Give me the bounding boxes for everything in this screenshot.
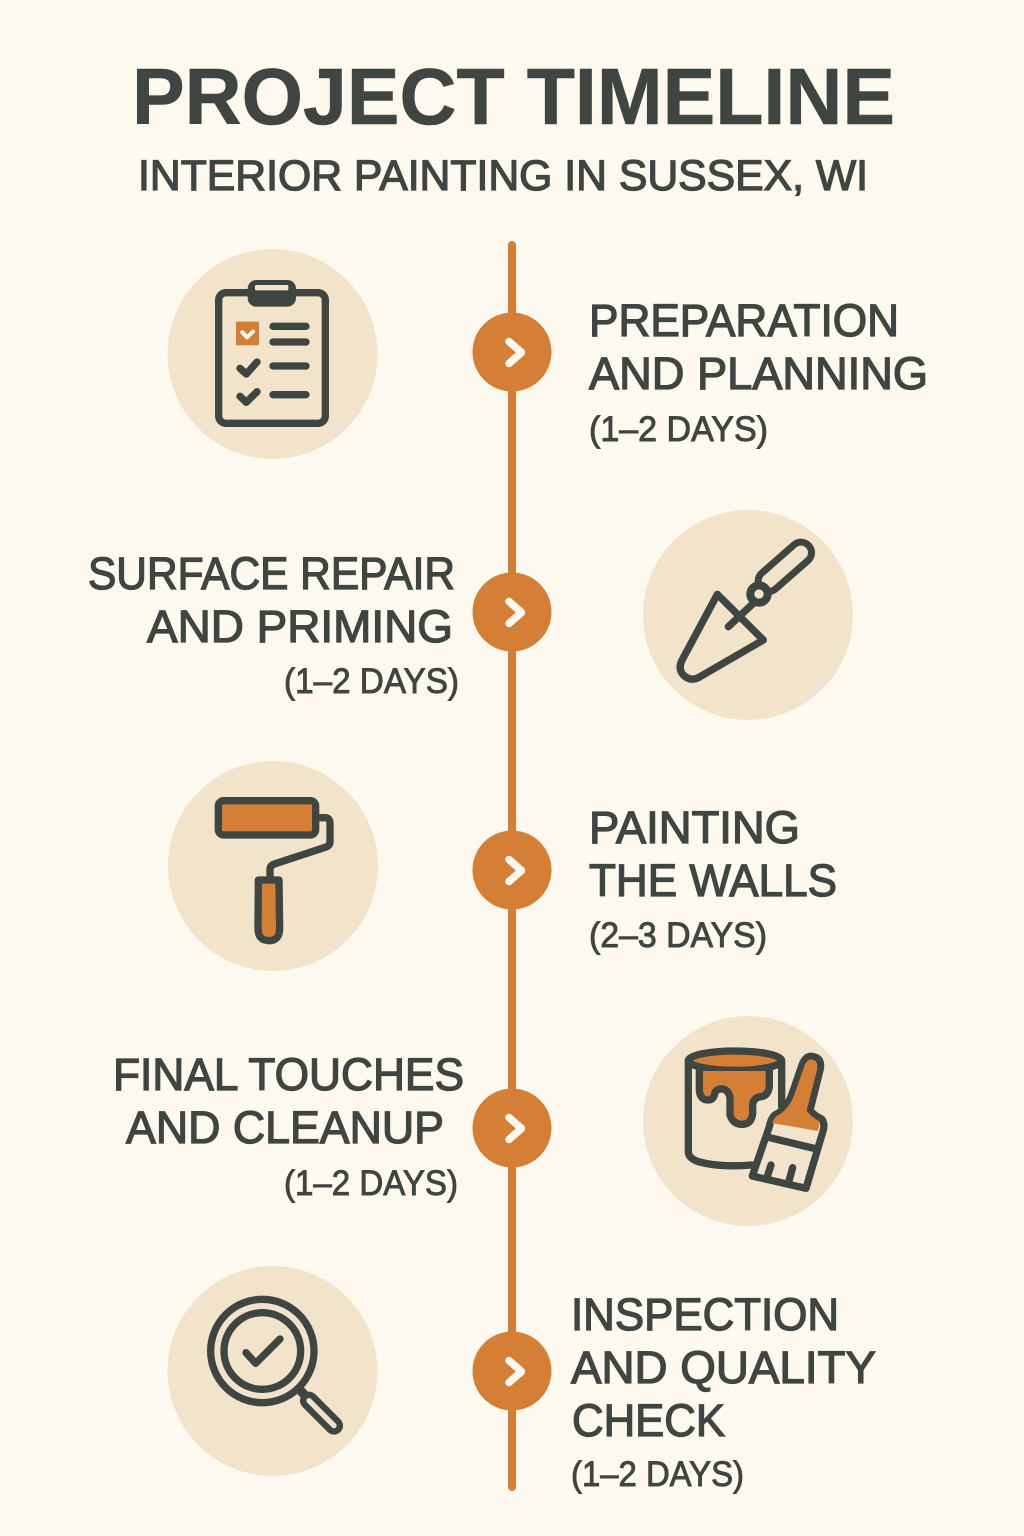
icon: clipboard checklist xyxy=(168,249,378,459)
step 3 text: (2–3 DAYS) xyxy=(589,916,767,955)
step 1 text: AND PLANNING xyxy=(589,348,928,399)
step 4 text xyxy=(113,1049,464,1203)
icon: paint roller xyxy=(168,761,378,971)
subtitle: INTERIOR PAINTING IN SUSSEX, WI xyxy=(138,152,868,200)
step 4: final touches and cleanup xyxy=(113,1016,853,1226)
step 3 text xyxy=(589,802,837,955)
icon: paint can and brush xyxy=(643,1016,853,1226)
title: PROJECT TIMELINE xyxy=(132,52,895,141)
step 5 text: AND QUALITY xyxy=(571,1342,876,1393)
step 5: inspection and quality check xyxy=(168,1266,876,1494)
step 3 text: PAINTING xyxy=(589,802,800,853)
icon: magnifier with check xyxy=(168,1266,378,1476)
step 2 text: (1–2 DAYS) xyxy=(284,662,459,701)
step 1 text: (1–2 DAYS) xyxy=(589,410,768,449)
step 5 text: CHECK xyxy=(572,1395,725,1446)
step 5 text: INSPECTION xyxy=(571,1289,839,1340)
step 2 text xyxy=(88,548,459,701)
step 5 text: (1–2 DAYS) xyxy=(571,1455,744,1494)
timeline node 1 xyxy=(472,312,552,392)
step 3: painting the walls xyxy=(168,761,837,971)
timeline node 4 xyxy=(472,1088,552,1168)
timeline line xyxy=(508,245,516,1487)
step 1: preparation and planning xyxy=(168,249,928,459)
step 3 text: THE WALLS xyxy=(589,855,837,906)
step 1 text xyxy=(589,295,928,449)
timeline node 2 xyxy=(472,572,552,652)
icon: trowel xyxy=(643,510,853,720)
step 2: surface repair and priming xyxy=(88,510,853,720)
step 2 text: AND PRIMING xyxy=(147,601,453,652)
step 4 text: (1–2 DAYS) xyxy=(284,1164,458,1203)
timeline node 3 xyxy=(472,830,552,910)
step 5 text xyxy=(571,1289,876,1494)
step 4 text: FINAL TOUCHES xyxy=(113,1049,464,1100)
step 1 text: PREPARATION xyxy=(589,295,899,346)
step 4 text: AND CLEANUP xyxy=(126,1102,444,1153)
timeline node 5 xyxy=(472,1332,552,1410)
step 2 text: SURFACE REPAIR xyxy=(88,548,455,599)
